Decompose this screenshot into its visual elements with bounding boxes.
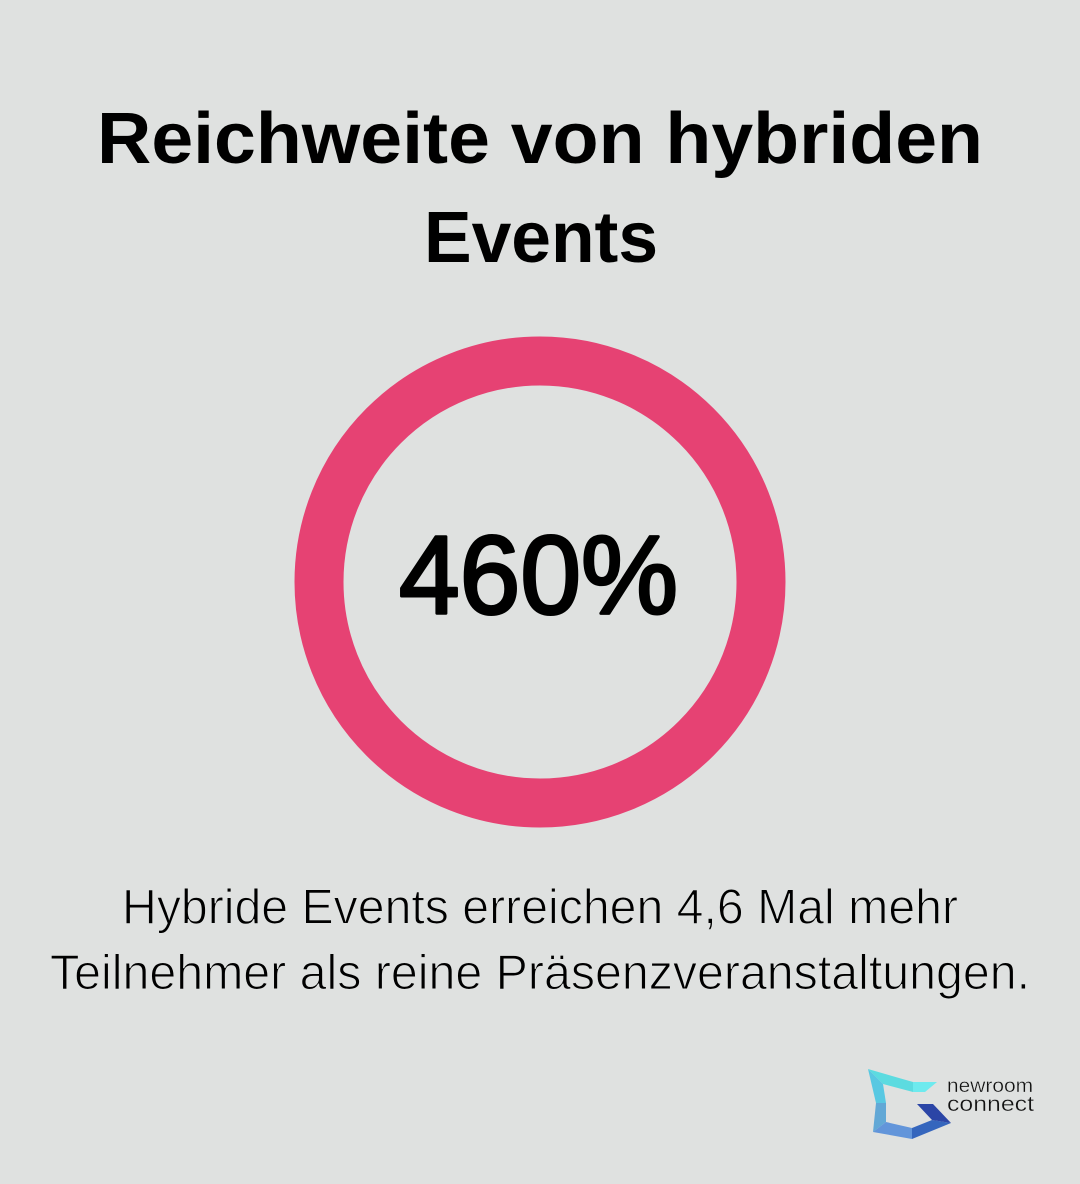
logo wordmark: connect	[947, 1093, 1034, 1116]
description text	[50, 880, 1030, 1000]
logo wordmark: newroom	[947, 1075, 1033, 1097]
title: Events	[424, 198, 658, 278]
description text: Teilnehmer als reine Präsenzveranstaltungen.	[50, 946, 1030, 1000]
title	[97, 99, 983, 278]
logo icon	[868, 1069, 951, 1139]
value: 460%: 460%	[399, 514, 678, 638]
logo wordmark	[947, 1075, 1034, 1116]
title: Reichweite von hybriden	[97, 99, 983, 179]
description text: Hybride Events erreichen 4,6 Mal mehr	[122, 880, 958, 934]
logo: newroom connect	[868, 1069, 1034, 1139]
donut ring	[319, 361, 761, 803]
